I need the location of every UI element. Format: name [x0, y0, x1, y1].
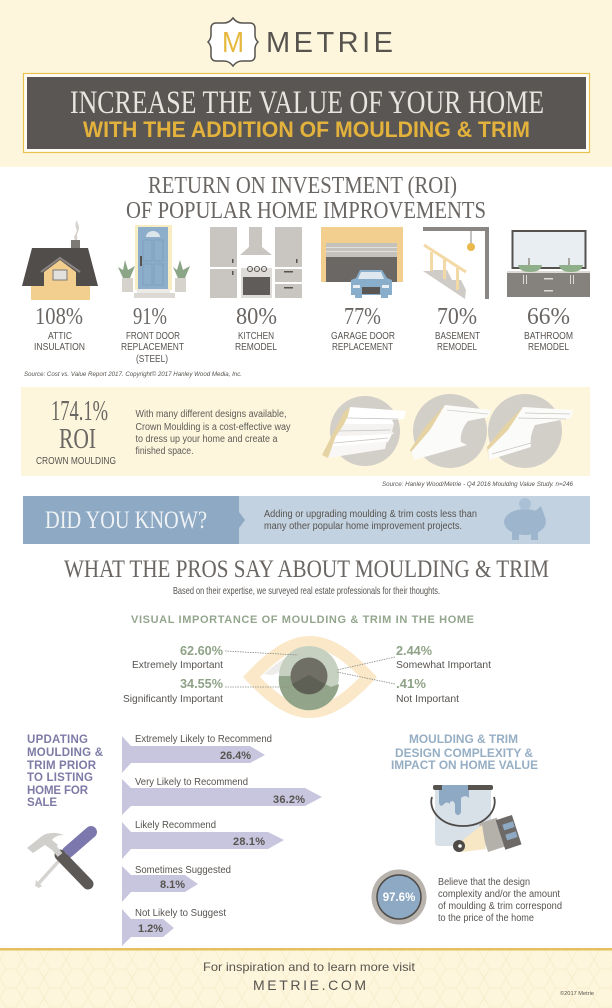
- icon: eye: [243, 636, 377, 718]
- stat: .41%: Not Important: [396, 693, 459, 705]
- design complexity text: of moulding & trim correspond: [438, 901, 562, 912]
- stat: 174.1% ROI: [36, 395, 116, 467]
- design complexity heading: MOULDING & TRIM: [409, 732, 518, 746]
- header band: [0, 0, 612, 167]
- crown moulding text: Crown Moulding is a cost-effective way: [136, 422, 290, 433]
- design complexity heading: DESIGN COMPLEXITY &: [395, 746, 533, 760]
- did you know text: Adding or upgrading moulding & trim costs less than: [264, 509, 477, 520]
- stat: 2.44%: [337, 644, 491, 671]
- design complexity text: complexity and/or the amount: [438, 889, 560, 900]
- pros subheading: Based on their expertise, we surveyed real estate professionals for their thoughts.: [173, 585, 440, 597]
- updating heading: MOULDING &: [27, 747, 103, 759]
- icon: door: [118, 225, 190, 298]
- bar: very likely: 36.2%: [273, 794, 305, 806]
- stat: 62.60%: Extremely Important: [132, 659, 223, 671]
- stat: 34.55%: 34.55%: [180, 677, 223, 691]
- stat: 62.60%: 62.60%: [180, 644, 223, 658]
- bar: not likely: [122, 907, 226, 946]
- stat: 97.6%: [372, 870, 426, 924]
- label: [121, 331, 184, 365]
- design complexity text: to the price of the home: [438, 913, 534, 924]
- bar: sometimes: 8.1%: [160, 879, 185, 891]
- logo badge: M: [222, 27, 244, 59]
- label: [524, 331, 573, 353]
- label: [435, 331, 480, 353]
- value: 80%: [236, 304, 277, 330]
- design complexity text: [438, 877, 562, 924]
- label: REPLACEMENT: [332, 342, 393, 353]
- did you know heading: DID YOU KNOW?: [45, 507, 207, 534]
- label: [34, 331, 85, 353]
- design complexity heading: [391, 732, 538, 772]
- footer url: METRIE.COM: [253, 977, 366, 993]
- label: REPLACEMENT: [121, 342, 184, 353]
- label: FRONT DOOR: [126, 331, 180, 342]
- icon: hammer and screwdriver: [27, 832, 91, 888]
- bar: not likely: Not Likely to Suggest: [135, 907, 226, 919]
- panel: crown moulding: [21, 387, 590, 476]
- updating heading: HOME FOR: [27, 785, 89, 797]
- logo wordmark: METRIE: [266, 27, 393, 59]
- icon: house: [22, 220, 98, 300]
- label: ATTIC: [48, 331, 72, 342]
- moulding illustration 3: [487, 394, 573, 468]
- label: REMODEL: [528, 342, 569, 353]
- ROI item: bathroom: [507, 231, 590, 353]
- logo: [208, 18, 393, 66]
- copyright: ©2017 Metrie: [560, 990, 594, 997]
- crown moulding text: With many different designs available,: [136, 409, 286, 420]
- title line 2: WITH THE ADDITION OF MOULDING & TRIM: [83, 117, 530, 142]
- moulding illustration 2: [410, 394, 491, 468]
- icon: garage: [321, 227, 403, 298]
- crown moulding text: [136, 409, 290, 457]
- stat: .41%: .41%: [396, 677, 426, 691]
- bar: extremely likely: Extremely Likely to Recommend: [135, 733, 272, 745]
- label: [331, 331, 395, 353]
- value: 108%: [35, 304, 83, 330]
- value: 66%: [527, 304, 570, 330]
- value: 77%: [344, 304, 381, 330]
- bar: sometimes: Sometimes Suggested: [135, 864, 231, 876]
- label: REMODEL: [235, 342, 277, 353]
- label: (STEEL): [136, 354, 168, 365]
- bar: very likely: [122, 776, 322, 815]
- bar: extremely likely: [122, 733, 272, 773]
- ROI heading: [126, 173, 486, 224]
- logo badge: [208, 18, 258, 66]
- stat: 174.1% ROI: CROWN MOULDING: [36, 456, 116, 467]
- ROI item: garage door: [321, 227, 403, 353]
- stat: 174.1% ROI: ROI: [59, 423, 96, 455]
- label: BATHROOM: [524, 331, 573, 342]
- icon: vanity: [507, 231, 590, 297]
- bar: likely: Likely Recommend: [135, 819, 216, 831]
- label: [235, 331, 277, 353]
- ROI item: attic insulation: [22, 220, 98, 353]
- icon: paint can and brush: [431, 785, 522, 852]
- crown moulding text: to dress up your home and create a: [136, 434, 278, 445]
- updating heading: TRIM PRIOR: [27, 760, 97, 772]
- stat: 2.44%: Somewhat Important: [396, 659, 491, 671]
- did you know text: many other popular home improvement projects.: [264, 521, 462, 532]
- ROI heading: RETURN ON INVESTMENT (ROI): [148, 173, 457, 199]
- stat: 2.44%: 2.44%: [396, 644, 432, 658]
- ROI item: kitchen: [210, 227, 302, 353]
- design complexity text: Believe that the design: [438, 877, 530, 888]
- stat: 34.55%: Significantly Important: [123, 693, 223, 705]
- crown moulding text: finished space.: [136, 446, 194, 457]
- stat: .41%: [337, 672, 459, 705]
- source note 2: Source: Hanley Wood/Metrie - Q4 2016 Moulding Value Study. n=246: [382, 482, 574, 488]
- footer: [0, 948, 612, 1008]
- stat: 34.55%: [123, 677, 290, 705]
- ROI heading: OF POPULAR HOME IMPROVEMENTS: [126, 198, 486, 224]
- stat: 97.6%: 97.6%: [383, 892, 415, 904]
- bar chart: likelihood to recommend: [122, 733, 322, 946]
- updating heading: TO LISTING: [27, 772, 93, 784]
- updating heading: [27, 734, 103, 809]
- source note: Source: Cost vs. Value Report 2017. Copyright© 2017 Hanley Wood Media, Inc.: [24, 371, 242, 378]
- label: BASEMENT: [435, 331, 480, 342]
- bar: sometimes: [122, 864, 231, 902]
- label: INSULATION: [34, 342, 85, 353]
- stat: 62.60%: [132, 644, 298, 671]
- bar: not likely: 1.2%: [138, 923, 163, 935]
- bar: likely: 28.1%: [233, 836, 265, 848]
- stat: 174.1% ROI: 174.1%: [51, 395, 108, 427]
- did you know text: [264, 509, 477, 532]
- bar: likely: [122, 819, 284, 859]
- footer line: For inspiration and to learn more visit: [203, 960, 416, 974]
- updating heading: UPDATING: [27, 734, 88, 746]
- moulding illustration 1: [322, 396, 406, 466]
- updating heading: SALE: [27, 797, 57, 809]
- title banner: [24, 74, 590, 152]
- label: GARAGE DOOR: [331, 331, 395, 342]
- value: 70%: [437, 304, 477, 330]
- did you know banner: [23, 496, 590, 544]
- value: 91%: [133, 304, 167, 330]
- bar: very likely: Very Likely to Recommend: [135, 776, 248, 788]
- icon: piggy bank: [504, 498, 546, 540]
- label: REMODEL: [437, 342, 477, 353]
- icon: stairs: [423, 229, 487, 299]
- eye chart: [123, 636, 491, 718]
- label: KITCHEN: [238, 331, 274, 342]
- icon: kitchen: [210, 227, 302, 298]
- design complexity heading: IMPACT ON HOME VALUE: [391, 758, 538, 772]
- visual importance heading: VISUAL IMPORTANCE OF MOULDING & TRIM IN THE HOME: [131, 614, 474, 626]
- bar: extremely likely: 26.4%: [220, 750, 251, 762]
- ROI item: front door: [118, 225, 190, 365]
- ROI item: basement: [423, 229, 487, 353]
